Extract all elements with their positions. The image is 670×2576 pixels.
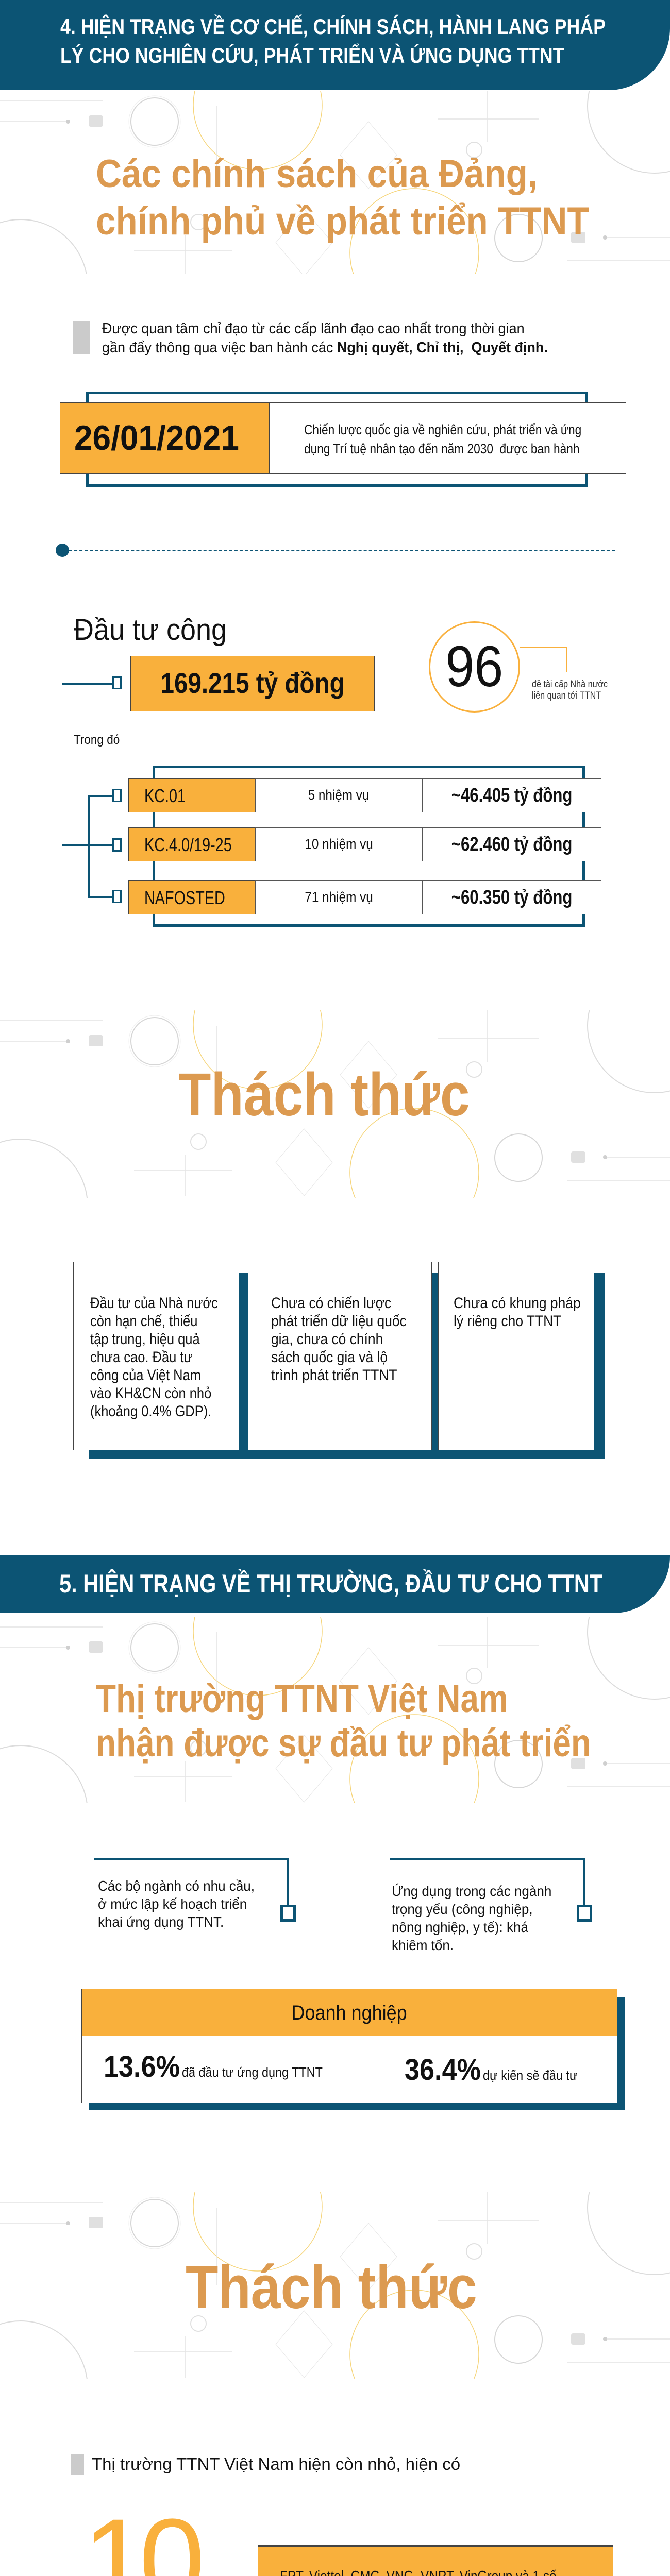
corporations list box	[258, 2545, 613, 2576]
row NAFOSTED: NAFOSTED	[144, 887, 225, 908]
header: Doanh nghiệp: Doanh nghiệp	[292, 2002, 407, 2024]
market intro text: Thị trường TTNT Việt Nam hiện còn nhỏ, hiện có	[92, 2454, 460, 2473]
background pattern 3	[0, 1617, 670, 1803]
card 3: lý riêng cho TTNT	[454, 1313, 561, 1330]
stat 13.6%	[81, 2036, 368, 2103]
card 3	[438, 1262, 594, 1450]
title: market: Thị trường TTNT Việt Nam	[96, 1677, 508, 1721]
date box	[60, 402, 269, 474]
card 2: sách quốc gia và lộ	[271, 1349, 388, 1366]
row KC.01: KC.01	[144, 785, 186, 806]
total investment box	[62, 656, 375, 711]
card 1: Đầu tư của Nhà nước	[90, 1295, 218, 1312]
date callout	[60, 392, 626, 487]
card 2: gia, chưa có chính	[271, 1331, 383, 1348]
callout right: nông nghiệp, y tế): khá	[392, 1919, 528, 1935]
intro text block: Được quan tâm chỉ đạo từ các cấp lãnh đạo cao nhất trong thời gian	[102, 320, 525, 337]
circle stat 96: đề tài cấp Nhà nước	[532, 679, 608, 690]
total investment box: 169.215 tỷ đồng	[160, 667, 345, 699]
section 4 header band: 4. HIỆN TRẠNG VỀ CƠ CHẾ, CHÍNH SÁCH, HÀNH LANG PHÁP	[60, 14, 606, 39]
funding table	[62, 766, 601, 927]
public investment heading: Đầu tư công	[74, 613, 227, 647]
row KC.4.0: KC.4.0/19-25	[144, 834, 232, 855]
row KC.4.0: ~62.460 tỷ đồng	[451, 834, 572, 855]
callout left: ở mức lập kế hoạch triển	[98, 1896, 247, 1912]
card 3: Chưa có khung pháp	[454, 1295, 581, 1312]
callout left	[94, 1858, 296, 1930]
callout right: trọng yếu (công nghiệp,	[392, 1901, 533, 1917]
row NAFOSTED	[128, 880, 601, 914]
card 1: tập trung, hiệu quả	[90, 1331, 200, 1348]
row KC.01: ~46.405 tỷ đồng	[451, 785, 572, 806]
stat 13.6%: 13.6% đã đầu tư ứng dụng TTNT	[104, 2050, 323, 2083]
section 4 header band	[0, 0, 670, 90]
title: market: nhận được sự đầu tư phát triển	[96, 1721, 591, 1765]
row KC.4.0	[128, 827, 601, 861]
circle stat 96	[429, 621, 608, 713]
card 2: trình phát triển TTNT	[271, 1367, 397, 1384]
title: policies	[96, 152, 589, 243]
row KC.4.0: 10 nhiệm vụ	[305, 836, 373, 852]
section 5 header band: 5. HIỆN TRẠNG VỀ THỊ TRƯỜNG, ĐẦU TƯ CHO TTNT	[59, 1569, 602, 1598]
callout right: khiêm tốn.	[392, 1937, 454, 1953]
date description: Chiến lược quốc gia về nghiên cứu, phát triển và ứng	[304, 422, 581, 437]
background pattern 4	[0, 2192, 670, 2379]
title: market	[96, 1677, 591, 1765]
row KC.01: 5 nhiệm vụ	[308, 787, 370, 803]
card 1: còn hạn chế, thiếu	[90, 1313, 197, 1330]
date description: dụng Trí tuệ nhân tạo đến năm 2030 được ban hành	[304, 441, 579, 456]
challenge cards	[73, 1262, 605, 1459]
card 1: (khoảng 0.4% GDP).	[90, 1403, 211, 1420]
circle stat 96: 96	[445, 634, 504, 699]
heading: challenges 2: Thách thức	[186, 2253, 477, 2321]
row NAFOSTED: 71 nhiệm vụ	[305, 889, 373, 905]
intro text block	[73, 320, 548, 356]
card 1	[73, 1262, 239, 1450]
callout left: khai ứng dụng TTNT.	[98, 1914, 224, 1930]
stat 36.4%: 36.4% dự kiến sẽ đầu tư	[405, 2053, 578, 2087]
heading: challenges 1: Thách thức	[178, 1061, 470, 1129]
section 4 header band: LÝ CHO NGHIÊN CỨU, PHÁT TRIỂN VÀ ỨNG DỤNG TTNT	[60, 43, 564, 67]
row KC.01	[128, 778, 601, 812]
date description	[269, 402, 626, 474]
header: Doanh nghiệp	[81, 1989, 617, 2036]
card 1: vào KH&CN còn nhỏ	[90, 1385, 211, 1402]
card 2: phát triển dữ liệu quốc	[271, 1313, 407, 1330]
section 5 header band	[0, 1555, 670, 1613]
enterprise stats table	[81, 1989, 625, 2110]
card 1: công của Việt Nam	[90, 1367, 201, 1384]
callout right	[390, 1858, 592, 1953]
card 1: chưa cao. Đầu tư	[90, 1349, 193, 1366]
card 2: Chưa có chiến lược	[271, 1295, 391, 1312]
background pattern 1	[0, 91, 670, 274]
row NAFOSTED: ~60.350 tỷ đồng	[451, 887, 572, 908]
stat 36.4%	[368, 2036, 617, 2103]
circle stat 96: liên quan tới TTNT	[532, 690, 601, 701]
callout right: Ứng dụng trong các ngành	[392, 1883, 551, 1899]
callout left: Các bộ ngành có nhu cầu,	[98, 1878, 255, 1894]
title: policies: chính phủ về phát triển TTNT	[96, 199, 589, 243]
intro text block: gần đẩy thông qua việc ban hành các Nghị quyết, Chỉ thị, Quyết định.	[102, 340, 548, 356]
date box: 26/01/2021	[74, 418, 239, 457]
background pattern 2	[0, 1010, 670, 1198]
dashed timeline	[56, 544, 615, 557]
"Trong đó" label: Trong đó	[74, 733, 120, 747]
title: policies: Các chính sách của Đảng,	[96, 152, 538, 196]
card 2	[248, 1262, 432, 1450]
